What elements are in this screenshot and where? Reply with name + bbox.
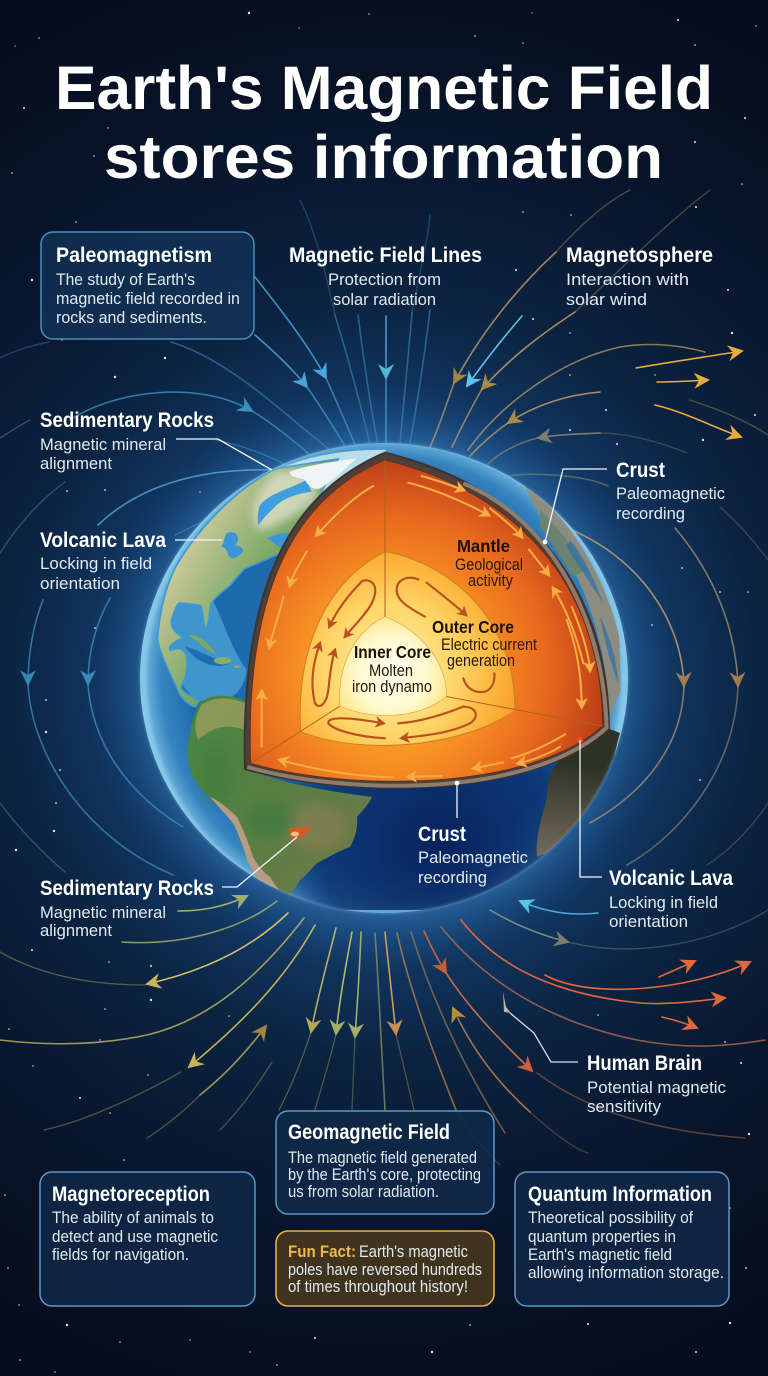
panel: Paleomagnetism <box>41 232 254 339</box>
label: Sedimentary Rocks lower: Sedimentary Rocks <box>40 877 214 900</box>
label: Crust lower <box>418 823 528 887</box>
magnetic field lines: left <box>0 342 330 875</box>
mantle convection arrows <box>262 476 590 777</box>
mantle <box>250 460 603 781</box>
South America <box>188 696 372 905</box>
panel: Magnetoreception: detect and use magnetic <box>52 1227 218 1246</box>
label: Magnetic Field Lines: solar radiation <box>333 290 436 309</box>
label: Sedimentary Rocks lower <box>40 877 214 940</box>
panel: Fun Fact: of times throughout history! <box>288 1277 468 1296</box>
panel: Quantum Information: Quantum Information <box>528 1183 712 1206</box>
volcano spot on rim <box>577 737 583 743</box>
magnetic field lines: top <box>255 190 768 486</box>
label: Magnetic Field Lines: Magnetic Field Lines <box>289 244 482 267</box>
label: Human Brain: Potential magnetic <box>587 1078 726 1097</box>
label: Volcanic Lava right: orientation <box>609 912 688 931</box>
Cuba <box>188 635 216 654</box>
title: stores information <box>104 123 663 191</box>
label: Magnetic Field Lines: Protection from <box>328 270 441 289</box>
Hispaniola <box>214 657 231 664</box>
panel: Fun Fact: Earth's magnetic <box>359 1242 468 1261</box>
label: Magnetosphere <box>566 244 713 309</box>
title: Earth's Magnetic Field <box>55 54 713 122</box>
label: Inner Core: Molten <box>369 662 413 680</box>
panel: Magnetoreception: The ability of animals to <box>52 1208 214 1227</box>
label: Sedimentary Rocks upper: Sedimentary Rocks <box>40 409 214 432</box>
panel: Magnetoreception: fields for navigation. <box>52 1245 189 1264</box>
label: Outer Core <box>432 617 537 670</box>
magnetic field lines: bottom <box>0 896 768 1165</box>
label: Crust lower: recording <box>418 868 487 887</box>
label: Volcanic Lava left: Locking in field <box>40 554 152 573</box>
magnetic field lines: right <box>572 507 768 865</box>
panel: Quantum Information: allowing information storage. <box>528 1263 724 1282</box>
arctic ice islands <box>290 458 357 489</box>
panel: Fun Fact: poles have reversed hundreds <box>288 1260 482 1279</box>
inner core <box>340 617 447 716</box>
icon: human brain marker <box>503 992 511 1013</box>
eastern land sliver <box>523 483 621 717</box>
panel: Fun Fact <box>276 1231 494 1306</box>
label: Human Brain: sensitivity <box>587 1097 662 1116</box>
panel: Geomagnetic Field: us from solar radiation. <box>288 1182 439 1201</box>
label: Volcanic Lava right: Volcanic Lava <box>609 867 733 890</box>
label: Crust upper right: recording <box>616 504 685 523</box>
label: Volcanic Lava left: Volcanic Lava <box>40 529 166 552</box>
label: Human Brain: Human Brain <box>587 1052 702 1075</box>
label: Crust upper right: Crust <box>616 459 665 482</box>
panel: Geomagnetic Field: The magnetic field generated <box>288 1148 477 1167</box>
Puerto Rico <box>234 665 241 668</box>
crust lighter right and bottom band <box>247 483 607 786</box>
panel: Geomagnetic Field: by the Earth's core, protecting <box>288 1165 481 1184</box>
label: Outer Core: generation <box>447 652 515 670</box>
atmosphere rim <box>140 443 628 913</box>
panel: Paleomagnetism: The study of Earth's <box>56 270 195 289</box>
northern pale land <box>253 470 317 530</box>
label: Volcanic Lava right: Locking in field <box>609 893 718 912</box>
eastern lakes lower <box>600 617 618 683</box>
label: Mantle: activity <box>468 572 514 590</box>
label: Volcanic Lava left <box>40 529 166 593</box>
Hudson Bay <box>258 480 312 525</box>
wedge seams <box>251 460 603 763</box>
outer core <box>300 552 515 745</box>
panel: Paleomagnetism: rocks and sediments. <box>56 308 207 327</box>
panel: Magnetoreception: Magnetoreception <box>52 1183 210 1206</box>
label: Crust lower: Crust <box>418 823 466 846</box>
panel: Quantum Information: Theoretical possibility of <box>528 1208 693 1227</box>
label: Magnetosphere: solar wind <box>566 290 647 309</box>
label: Human Brain <box>587 1052 726 1116</box>
label: Sedimentary Rocks lower: alignment <box>40 921 112 940</box>
eastern lakes <box>567 540 603 603</box>
panel: Fun Fact: Fun Fact: <box>288 1242 356 1261</box>
Earth globe cutaway <box>140 443 640 913</box>
glow around globe <box>74 376 694 980</box>
North America <box>158 460 337 706</box>
panel: Geomagnetic Field <box>276 1111 494 1214</box>
eastern green patch <box>540 510 587 577</box>
label: Mantle: Mantle <box>457 536 510 556</box>
title <box>55 54 713 191</box>
label: Magnetosphere: Interaction with <box>566 270 689 289</box>
panel: Magnetoreception <box>40 1172 255 1306</box>
northern South America highlands <box>195 699 245 740</box>
lava spot in South America <box>289 827 312 838</box>
label: Crust upper right <box>616 459 725 523</box>
label: Mantle <box>455 536 523 590</box>
panel: Paleomagnetism: magnetic field recorded in <box>56 289 240 308</box>
panel: Geomagnetic Field: Geomagnetic Field <box>288 1121 450 1144</box>
label: Volcanic Lava left: orientation <box>40 574 120 593</box>
label: Volcanic Lava right <box>609 867 733 931</box>
South American interior texture <box>200 750 347 850</box>
panel: Quantum Information: quantum properties in <box>528 1227 676 1246</box>
panel: Paleomagnetism: Paleomagnetism <box>56 244 212 267</box>
St Lawrence gulf <box>266 533 290 548</box>
label: Magnetosphere: Magnetosphere <box>566 244 713 267</box>
ocean <box>140 443 628 913</box>
label: Sedimentary Rocks lower: Magnetic mineral <box>40 903 166 922</box>
crust shell <box>245 453 609 788</box>
Great Lakes <box>221 532 243 558</box>
shallow water around Gulf and Caribbean <box>170 597 247 702</box>
label: Sedimentary Rocks upper <box>40 409 214 473</box>
label: Inner Core: iron dynamo <box>352 678 432 696</box>
label: Sedimentary Rocks upper: alignment <box>40 454 112 473</box>
deep southern ocean <box>278 760 588 910</box>
label: Inner Core: Inner Core <box>354 642 431 662</box>
continents <box>158 450 640 910</box>
arctic shelf <box>284 450 386 492</box>
panel: Quantum Information: Earth's magnetic field <box>528 1245 672 1264</box>
panel: Quantum Information <box>515 1172 729 1306</box>
outer core convection arrows <box>312 578 494 738</box>
label: Outer Core: Outer Core <box>432 617 514 637</box>
label: Crust lower: Paleomagnetic <box>418 848 528 867</box>
label: Sedimentary Rocks upper: Magnetic mineral <box>40 435 166 454</box>
Africa fragment <box>537 728 620 857</box>
label: Inner Core <box>352 642 432 696</box>
label: Crust upper right: Paleomagnetic <box>616 484 725 503</box>
label: Mantle: Geological <box>455 556 523 574</box>
Andes coast <box>210 797 290 905</box>
leader lines <box>175 439 607 1062</box>
deep Caribbean streak <box>185 647 230 666</box>
label: Magnetic Field Lines <box>289 244 482 309</box>
label: Outer Core: Electric current <box>441 636 537 654</box>
cutaway wedge <box>245 453 609 788</box>
